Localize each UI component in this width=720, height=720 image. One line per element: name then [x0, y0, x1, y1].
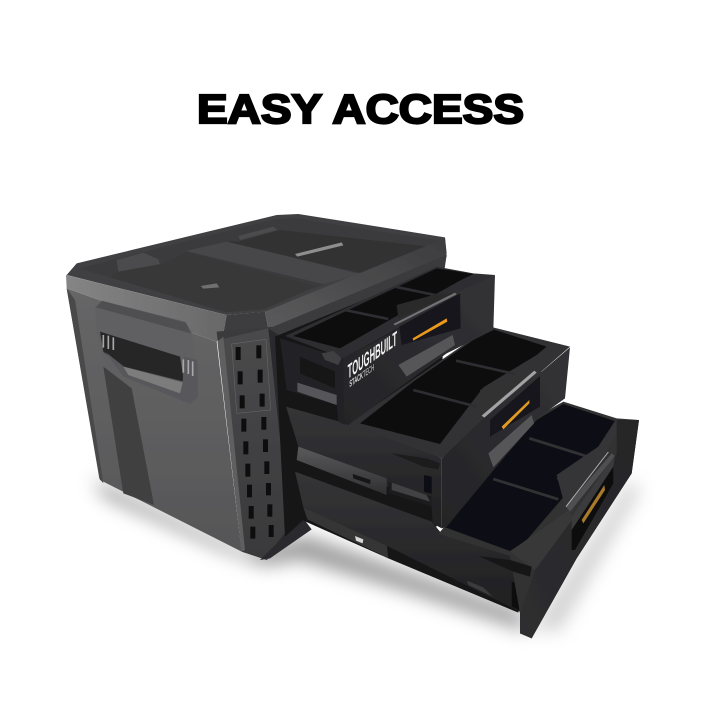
slide lugs [467, 581, 493, 597]
bottom drawer handle rim [557, 418, 620, 513]
top drawer handle notch [397, 293, 455, 318]
middle drawer interior [360, 328, 547, 444]
bottom drawer slide highlight [303, 507, 388, 558]
toolbox product [66, 214, 639, 638]
middle drawer side [286, 407, 442, 528]
middle drawer handle rim [480, 371, 537, 418]
middle drawer front [442, 347, 570, 528]
top drawer slide [297, 383, 337, 405]
middle drawer slide inner [388, 482, 432, 507]
top drawer metal strip [393, 293, 457, 325]
rail foot [260, 518, 312, 560]
rear edge strip [67, 288, 103, 483]
bottom drawer side [295, 472, 533, 612]
lid badge [201, 283, 219, 289]
drawers [260, 267, 639, 638]
lid outer rim [67, 214, 447, 315]
rail slots [236, 345, 274, 539]
bottom drawer grip [572, 455, 615, 530]
darker side recess [103, 367, 154, 505]
rail bracket [268, 328, 293, 533]
rail left strip [217, 337, 245, 552]
bottom drawer metal strip [566, 453, 615, 512]
side panel [67, 288, 242, 552]
lid tray surface [78, 218, 440, 311]
top drawer handle recess [399, 293, 461, 345]
bottom drawer rim corner [510, 510, 573, 570]
slide slot [353, 474, 371, 484]
bottom drawer strip highlight [566, 452, 608, 507]
handle plate [95, 301, 198, 404]
middle drawer stop [424, 475, 432, 494]
bottom drawer corner clip [478, 556, 532, 577]
top drawer interior [293, 268, 473, 348]
top corner block [223, 312, 268, 333]
handle arms [105, 352, 198, 404]
top drawer sub logo: STACKTECH [349, 363, 374, 390]
lid latch left [117, 253, 160, 272]
middle drawer corner clip [392, 453, 440, 469]
lid logo [295, 242, 343, 257]
top drawer lower grip [398, 335, 455, 377]
top drawer front [343, 275, 495, 425]
middle drawer dividers [413, 361, 515, 407]
top drawer rim [285, 267, 495, 358]
handle cap [96, 301, 191, 333]
middle drawer tray rim [348, 327, 570, 458]
bottom drawer base [438, 402, 639, 638]
handle grip [123, 367, 183, 393]
bottom drawer handle recess [572, 463, 613, 550]
corner rail [218, 328, 290, 560]
middle drawer handle recess [490, 376, 540, 437]
toolbox body and lid [66, 214, 447, 560]
top drawer corner clip [322, 351, 342, 365]
lid mat left [110, 252, 317, 312]
cabinet opening [275, 270, 443, 537]
slide buttons [355, 536, 363, 543]
bottom drawer orange grip [582, 485, 605, 523]
handle opening [100, 332, 184, 382]
top drawer side [280, 338, 345, 425]
middle drawer orange grip [502, 400, 529, 429]
floor shadow [92, 478, 640, 632]
lid strap [186, 242, 360, 284]
drawers: TOUGHBUILT [348, 326, 397, 383]
top band front left [66, 275, 227, 342]
top drawer side bar [300, 357, 335, 388]
top band front right [265, 238, 447, 335]
lid latch right [238, 227, 277, 240]
lid mat right [227, 230, 428, 273]
title: EASY ACCESS [197, 86, 524, 132]
handle clips [103, 335, 193, 376]
bottom drawer dividers [493, 438, 590, 499]
middle drawer lower grip [488, 415, 534, 467]
bottom drawer front [520, 420, 639, 638]
middle drawer slide [297, 447, 387, 495]
cabinet backing [217, 255, 447, 559]
top drawer dividers [345, 287, 435, 319]
slide rear stop [512, 582, 520, 610]
rail outline mark [232, 339, 271, 413]
bottom drawer interior [443, 404, 617, 551]
top drawer orange grip [413, 318, 447, 341]
bottom drawer slide lower [303, 507, 520, 613]
slide carriage [392, 483, 430, 502]
middle drawer metal strip [482, 371, 537, 418]
